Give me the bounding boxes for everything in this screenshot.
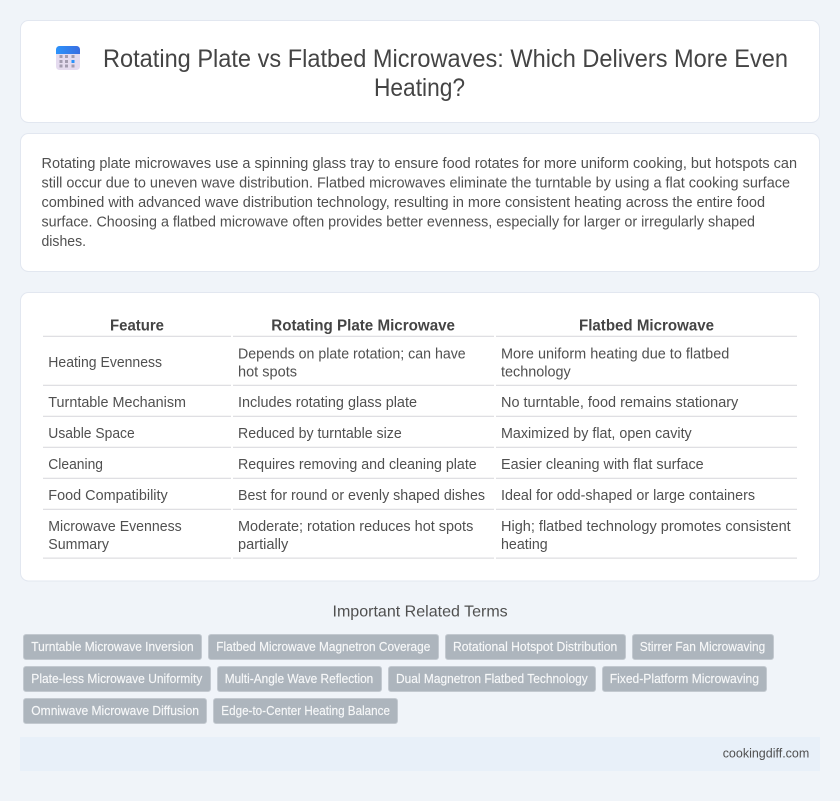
title xyxy=(103,46,788,102)
table row: heating evenness: Heating Evenness xyxy=(48,355,162,371)
table row: microwave evenness summary: Summary xyxy=(48,537,110,553)
table row: microwave evenness summary: heating xyxy=(501,537,548,553)
table row: turntable mechanism: No turntable, food remains stationary xyxy=(501,395,739,411)
table row: usable space: Maximized by flat, open cavity xyxy=(501,426,692,442)
table row: cleaning: Easier cleaning with flat surface xyxy=(501,457,704,473)
table row: microwave evenness summary xyxy=(48,519,791,553)
tag xyxy=(218,666,382,692)
table row: microwave evenness summary: High; flatbed technology promotes consistent xyxy=(501,519,791,535)
table row: cleaning: Cleaning xyxy=(48,457,103,473)
table row: usable space: Usable Space xyxy=(48,426,135,442)
tag xyxy=(632,634,774,660)
tag: Multi-Angle Wave Reflection xyxy=(225,672,373,686)
table row: heating evenness: hot spots xyxy=(238,364,297,380)
title: Rotating Plate vs Flatbed Microwaves: Which Delivers More Even xyxy=(103,46,788,73)
tag: Plate-less Microwave Uniformity xyxy=(31,672,203,686)
tag: Fixed-Platform Microwaving xyxy=(610,672,759,686)
table row: heating evenness: More uniform heating due to flatbed xyxy=(501,346,729,362)
table row: turntable mechanism xyxy=(48,395,739,411)
text block: intro paragraph: still occur due to uneven wave distribution. Flatbed microwaves eliminate the turntable by using a flat cooking surface xyxy=(42,176,790,192)
tag xyxy=(388,666,596,692)
table row: heating evenness: technology xyxy=(501,364,571,380)
table row: heating evenness: Depends on plate rotation; can have xyxy=(238,346,466,362)
table row: microwave evenness summary: Moderate; rotation reduces hot spots xyxy=(238,519,473,535)
table header row: Feature xyxy=(110,318,164,334)
tag xyxy=(24,666,210,692)
tag: Stirrer Fan Microwaving xyxy=(640,640,765,654)
table row: turntable mechanism: Includes rotating glass plate xyxy=(238,395,417,411)
tag: Dual Magnetron Flatbed Technology xyxy=(396,672,588,686)
table row: food compatibility: Food Compatibility xyxy=(48,488,168,504)
tag xyxy=(24,634,202,660)
table row: microwave evenness summary: partially xyxy=(238,537,289,553)
panel: title card xyxy=(20,20,820,122)
tag list: related terms xyxy=(24,634,774,724)
table row: microwave evenness summary: Microwave Evenness xyxy=(48,519,182,535)
title: Heating? xyxy=(374,75,465,102)
text block: intro paragraph: combined with advanced wave distribution technology, resulting in more consistent heating across the entire food xyxy=(42,195,765,211)
table header row: Flatbed Microwave xyxy=(579,318,714,334)
tag: Flatbed Microwave Magnetron Coverage xyxy=(216,640,430,654)
table row: turntable mechanism: Turntable Mechanism xyxy=(48,395,186,411)
table row: cleaning xyxy=(48,457,704,473)
table row: heating evenness xyxy=(48,346,729,380)
footer xyxy=(20,737,820,771)
table row: food compatibility xyxy=(48,488,755,504)
text block: intro paragraph: surface. Choosing a flatbed microwave often provides better evenness, especially for larger or irregularly shaped xyxy=(42,214,755,230)
panel: comparison table xyxy=(20,292,820,581)
table row: food compatibility: Best for round or evenly shaped dishes xyxy=(238,488,485,504)
table row: usable space: Reduced by turntable size xyxy=(238,426,402,442)
tag: Turntable Microwave Inversion xyxy=(31,640,194,654)
tag: Omniwave Microwave Diffusion xyxy=(31,704,199,718)
table row: usable space xyxy=(48,426,692,442)
text block: intro paragraph xyxy=(42,156,797,250)
tag xyxy=(24,698,206,724)
table header row xyxy=(110,318,714,334)
tag: Edge-to-Center Heating Balance xyxy=(221,704,390,718)
tag: Rotational Hotspot Distribution xyxy=(453,640,617,654)
tag xyxy=(214,698,398,724)
text block: intro paragraph: dishes. xyxy=(42,234,86,250)
heading: important related terms: Important Related Terms xyxy=(332,604,508,621)
table header row: Rotating Plate Microwave xyxy=(271,318,455,334)
table row: cleaning: Requires removing and cleaning plate xyxy=(238,457,477,473)
icon: calendar xyxy=(56,46,80,70)
tag xyxy=(446,634,626,660)
table row: food compatibility: Ideal for odd-shaped or large containers xyxy=(501,488,755,504)
panel: introduction xyxy=(20,134,820,272)
tag xyxy=(602,666,766,692)
footer: cookingdiff.com xyxy=(723,746,809,761)
text block: intro paragraph: Rotating plate microwaves use a spinning glass tray to ensure food rotates for more uniform cooking, but hotspots can xyxy=(42,156,797,172)
tag xyxy=(208,634,438,660)
